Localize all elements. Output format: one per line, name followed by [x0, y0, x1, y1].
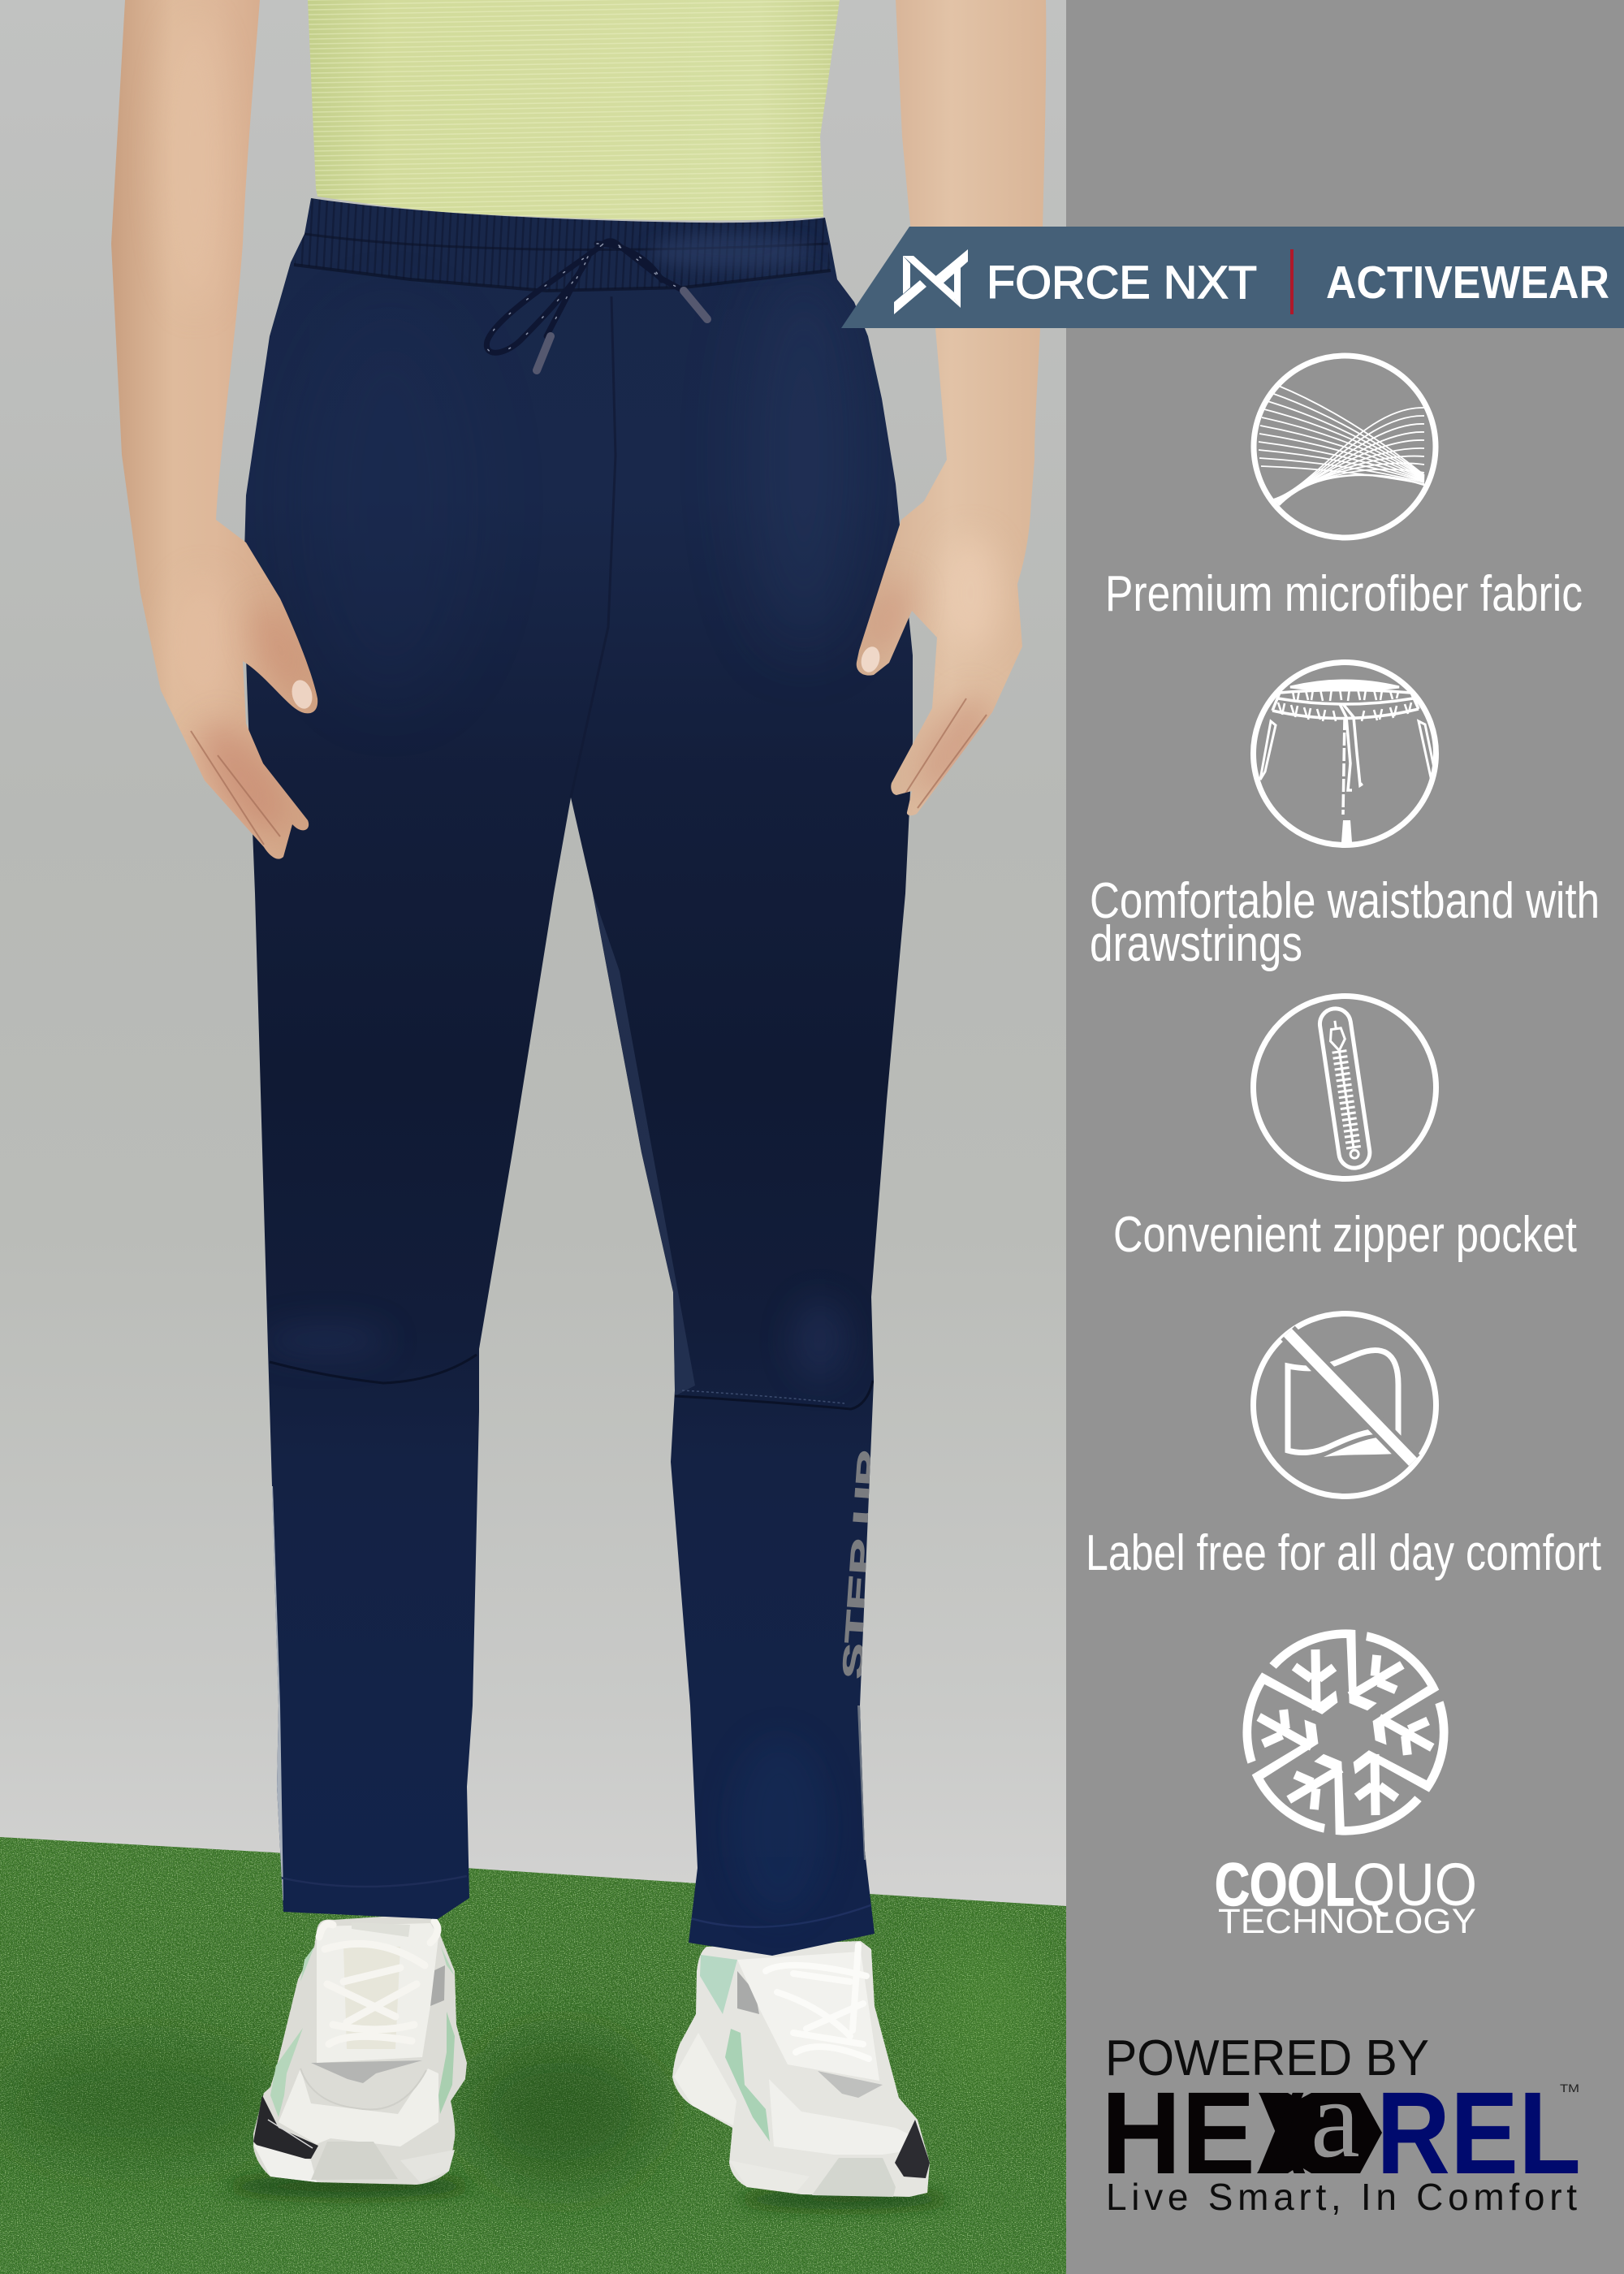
powered by hexarel logo	[1101, 2030, 1581, 2218]
hexagon X mark	[1257, 2093, 1382, 2173]
icon: force nxt logo mark	[894, 249, 968, 314]
icon: crossed-out label	[1254, 1314, 1436, 1496]
icon: crossing fibres	[1254, 356, 1436, 538]
drawstring	[486, 241, 707, 370]
technology wordmark: TECHNOLOGY	[1218, 1902, 1476, 1941]
right leg side stripe	[857, 1706, 866, 1860]
icon: snowflake badge	[1219, 1615, 1472, 1849]
model: left arm and hand	[111, 0, 319, 859]
centre seam	[593, 296, 617, 692]
feature: comfortable waistband	[1090, 663, 1600, 972]
feature: premium microfiber fabric	[1105, 356, 1583, 622]
right grey panel	[1066, 0, 1624, 2274]
wordmark black part: HE	[1101, 2068, 1255, 2198]
model: green t-shirt	[308, 0, 840, 220]
icon: waistband with drawstring	[1254, 663, 1436, 845]
trademark: TM	[1560, 2082, 1579, 2095]
left shoe	[253, 1915, 467, 2185]
knee seams	[270, 1355, 477, 1383]
brand name: FORCE NXT	[987, 257, 1257, 309]
label line 2: drawstrings	[1090, 916, 1302, 972]
hem folds	[280, 1876, 467, 1887]
brand banner	[841, 227, 1624, 328]
photo background: artificial grass	[0, 1831, 1066, 2274]
red divider	[1290, 249, 1294, 314]
model: right arm and hand	[857, 0, 1046, 815]
navy track pants	[244, 198, 913, 1956]
feature: convenient zipper pocket	[1113, 996, 1577, 1263]
coolquo wordmark light part: QUO	[1353, 1851, 1477, 1918]
photo background: studio wall	[0, 0, 1066, 2274]
wordmark navy part: REL	[1376, 2068, 1581, 2198]
icon: zipper	[1254, 996, 1436, 1179]
feature: label free	[1086, 1314, 1601, 1581]
reflective leg text: STEP UP	[836, 1449, 885, 1680]
coolquo wordmark: COOL	[1215, 1851, 1354, 1918]
wordmark serif a: a	[1311, 2057, 1360, 2181]
wordmark X: X	[1257, 2068, 1306, 2198]
powered by: POWERED BY	[1105, 2030, 1429, 2086]
right shoe	[672, 1941, 930, 2197]
left leg side stripe	[272, 1486, 283, 1900]
banner ribbon	[841, 227, 1624, 328]
waistband gathers	[294, 198, 831, 291]
tagline: Live Smart, In Comfort	[1106, 2176, 1577, 2218]
coolquo technology	[1215, 1615, 1477, 1941]
